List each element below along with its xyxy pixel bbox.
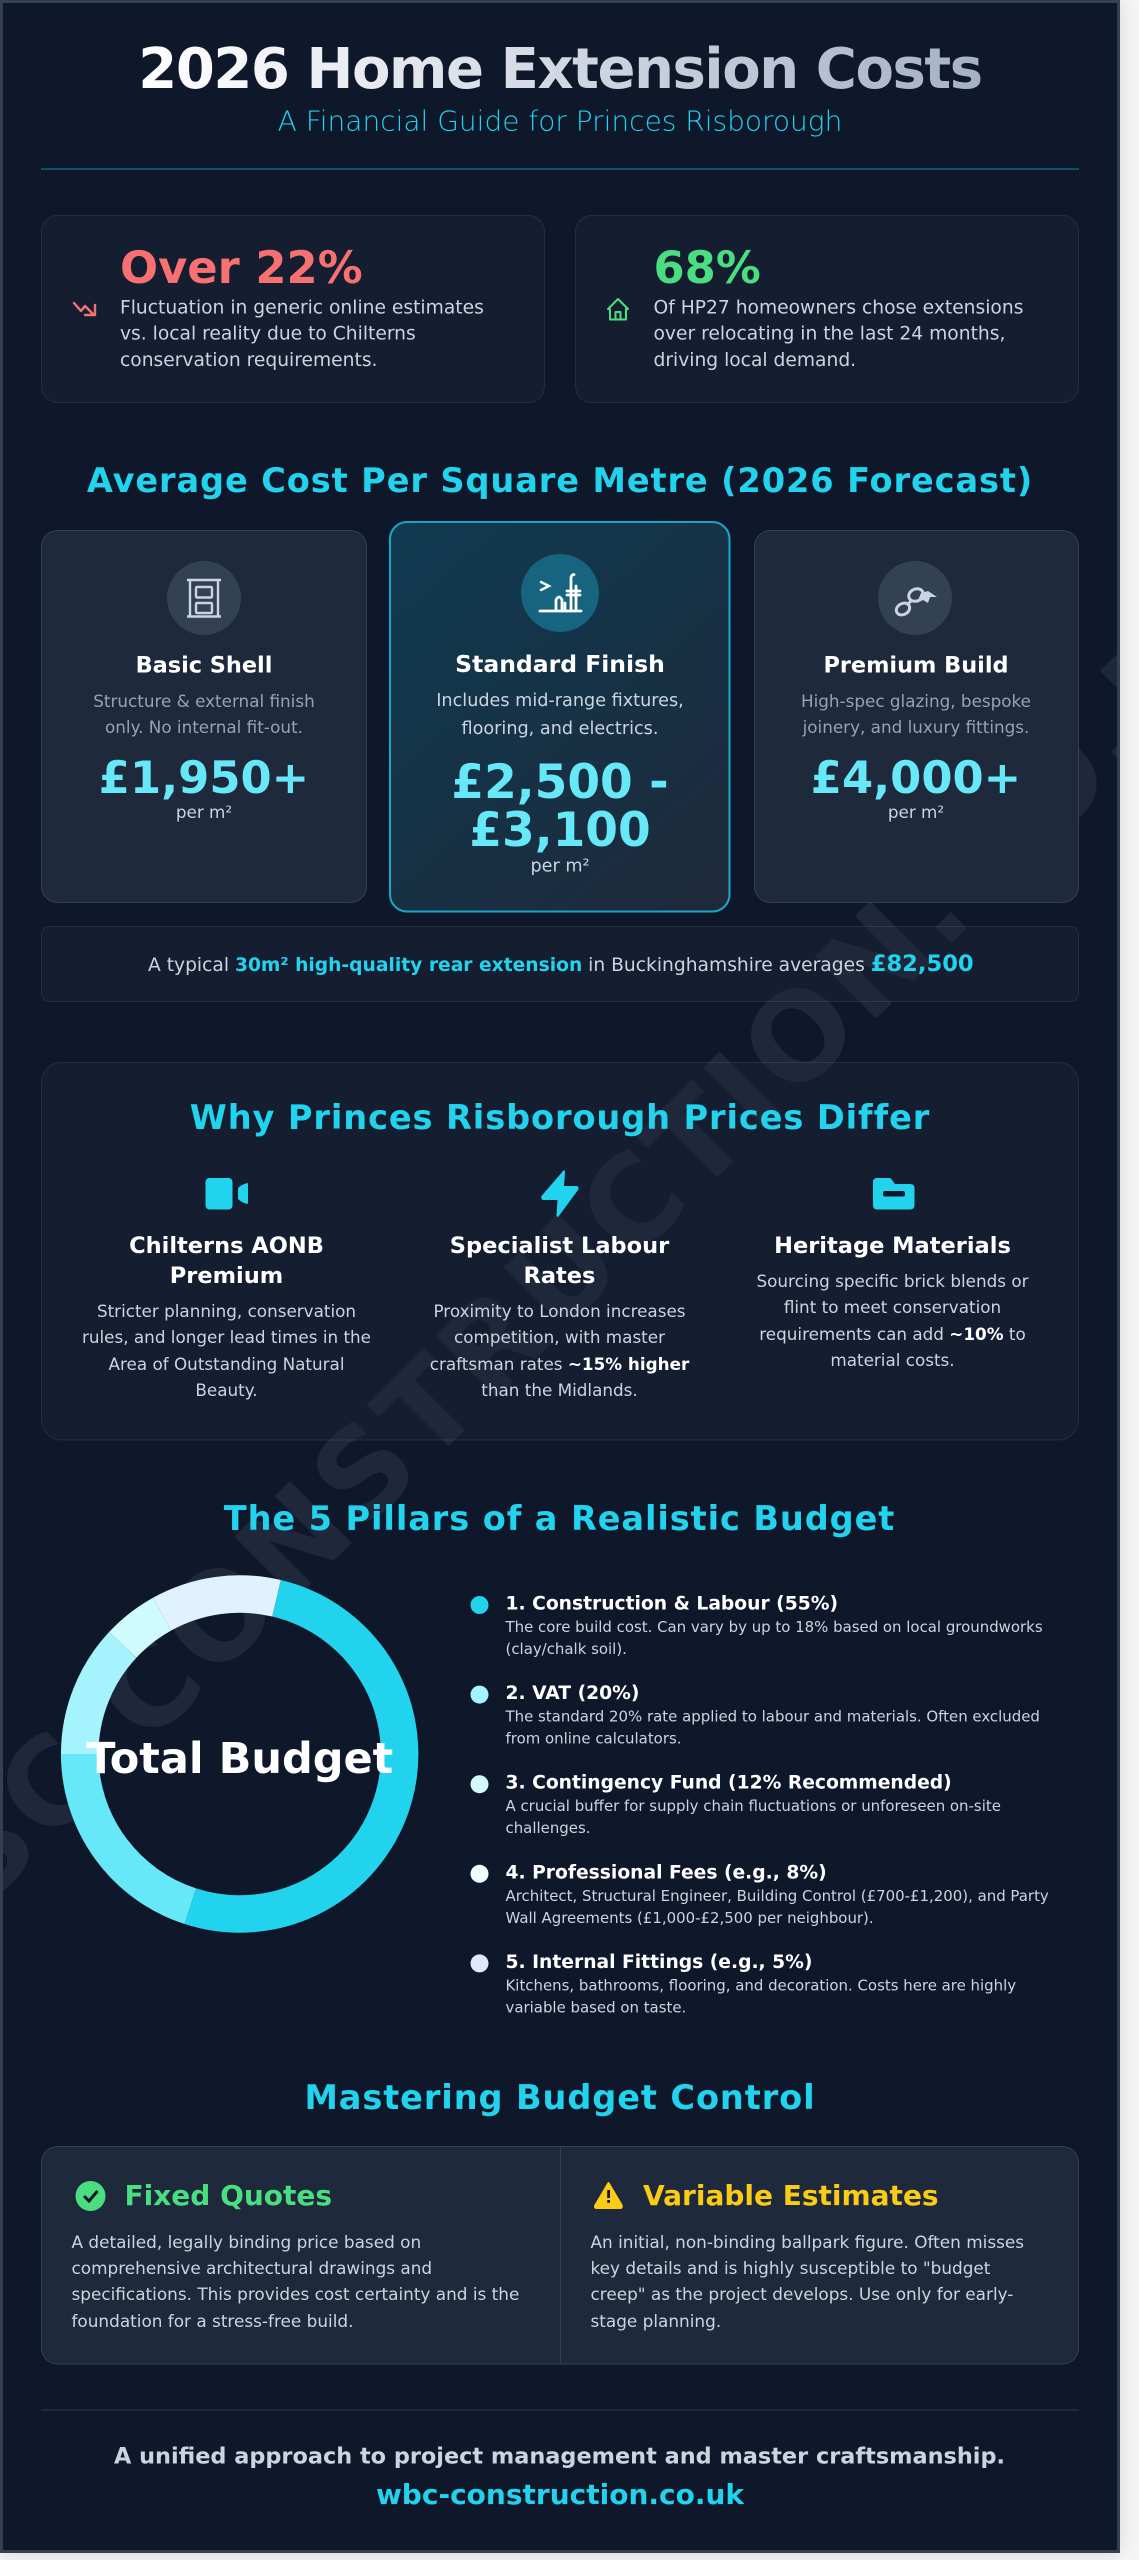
column: heritage — [756, 1178, 1029, 1370]
panel: basic shell — [42, 530, 366, 902]
legend item 4: Wall Agreements (£1,000-£2,500 per neighbour). — [506, 1909, 874, 1927]
legend item 5 — [470, 1952, 1016, 2016]
panel: premium build — [754, 530, 1078, 902]
column text: Area of Outstanding Natural — [109, 1354, 344, 1374]
icon: check — [76, 2181, 106, 2211]
column text: rules, and longer lead times in the — [82, 1327, 371, 1347]
column text: key details and is highly susceptible to "budget — [590, 2258, 991, 2278]
segment: contingency — [80, 1645, 123, 1754]
donut centre label: Total Budget — [86, 1734, 393, 1784]
card description: High-spec glazing, bespoke — [801, 691, 1031, 711]
column text: stage planning. — [590, 2311, 721, 2331]
legend item 5: variable based on taste. — [506, 1998, 686, 2016]
column text — [82, 1301, 371, 1400]
icon: bolt — [541, 1170, 579, 1217]
donut chart — [80, 1594, 400, 1914]
panel: stat over 22% — [42, 216, 544, 402]
panel: stat 68% — [576, 216, 1078, 402]
legend item 4 — [470, 1862, 1049, 1927]
column text: requirements can add ~10% to — [759, 1324, 1026, 1344]
legend item 1: 1. Construction & Labour (55%) — [506, 1594, 838, 1614]
stat description: Of HP27 homeowners chose extensions — [654, 298, 1023, 318]
legend item 3: 3. Contingency Fund (12% Recommended) — [506, 1773, 952, 1794]
legend item 5: Kitchens, bathrooms, flooring, and decoration. Costs here are highly — [506, 1976, 1016, 1994]
legend item 1 — [470, 1594, 1043, 1658]
column heading: Fixed Quotes — [124, 2179, 332, 2212]
legend item 3 — [470, 1773, 1001, 1837]
legend item 3: challenges. — [506, 1819, 590, 1837]
segment: construction — [190, 1598, 400, 1914]
legend item 3: A crucial buffer for supply chain fluctuations or unforeseen on-site — [506, 1797, 1001, 1815]
heading: five pillars: The 5 Pillars of a Realistic Budget — [224, 1499, 895, 1538]
legend item 2: 2. VAT (20%) — [506, 1683, 639, 1704]
column title: Chilterns AONB — [129, 1233, 324, 1259]
icon: trending down — [74, 303, 95, 315]
heading: Why Princes Risborough Prices Differ — [190, 1098, 930, 1137]
column text — [430, 1301, 690, 1400]
price: £1,950+ — [99, 751, 309, 804]
column text: material costs. — [830, 1350, 955, 1370]
price: £2,500 - — [451, 755, 669, 810]
stat description — [120, 298, 484, 371]
legend — [470, 1594, 1049, 2016]
icon: video — [206, 1178, 248, 1210]
legend item 5: 5. Internal Fittings (e.g., 5%) — [506, 1952, 812, 1973]
tagline: A unified approach to project management and master craftsmanship. — [114, 2444, 1005, 2470]
panel: why prices differ — [42, 1062, 1078, 1440]
callout: typical extension: A typical 30m² high-quality rear extension in Buckinghamshire averages £82,500 — [148, 951, 974, 977]
stat value: 68% — [654, 241, 761, 294]
segment: fees — [123, 1614, 162, 1645]
column text: comprehensive architectural drawings and — [72, 2258, 432, 2278]
icon: warning — [595, 2183, 622, 2208]
legend item 2: The standard 20% rate applied to labour and materials. Often excluded — [504, 1708, 1040, 1726]
column heading: Variable Estimates — [643, 2179, 939, 2212]
legend item 2: from online calculators. — [506, 1730, 682, 1748]
column text — [756, 1271, 1029, 1370]
legend item 1: (clay/chalk soil). — [506, 1640, 627, 1658]
column: fixed quotes — [72, 2179, 519, 2331]
column title — [450, 1233, 670, 1289]
heading: average cost: Average Cost Per Square Metre (2026 Forecast) — [87, 461, 1033, 500]
heading: budget control: Mastering Budget Control — [304, 2078, 816, 2117]
stat value: Over 22% — [120, 241, 363, 294]
callout: typical extension — [42, 926, 1078, 1002]
column text — [72, 2232, 519, 2331]
card description — [801, 691, 1031, 737]
segment: vat — [80, 1754, 190, 1906]
column: labour — [430, 1170, 690, 1400]
stat description: driving local demand. — [654, 350, 856, 371]
column text: flint to meet conservation — [784, 1297, 1001, 1317]
column text — [590, 2232, 1024, 2331]
card description: flooring, and electrics. — [462, 719, 658, 739]
column text: creep" as the project develops. Use only for early- — [590, 2284, 1013, 2304]
panel: standard finish — [390, 522, 730, 912]
price: £3,100 — [469, 803, 651, 858]
icon: construction site — [521, 554, 599, 632]
stat description: conservation requirements. — [120, 350, 378, 371]
column text: An initial, non-binding ballpark figure. Often misses — [590, 2232, 1024, 2252]
column title — [129, 1233, 324, 1289]
legend item 1: The core build cost. Can vary by up to 18% based on local groundworks — [504, 1618, 1043, 1636]
stat description — [654, 298, 1023, 371]
card description: joinery, and luxury fittings. — [802, 717, 1029, 737]
title: 2026 Home Extension Costs — [138, 37, 982, 102]
icon: home — [608, 299, 628, 320]
legend item 4: 4. Professional Fees (e.g., 8%) — [506, 1862, 827, 1883]
column: variable estimates — [590, 2179, 1024, 2331]
card title: Basic Shell — [136, 652, 272, 678]
panel: fixed vs variable — [42, 2146, 1078, 2364]
card description — [436, 691, 684, 739]
column text: foundation for a stress-free build. — [72, 2311, 353, 2331]
segment: fittings — [162, 1594, 276, 1614]
footer — [114, 2444, 1005, 2511]
column text: Proximity to London increases — [433, 1301, 686, 1321]
column text: Sourcing specific brick blends or — [756, 1271, 1029, 1291]
column title: Rates — [524, 1263, 595, 1289]
column text: specifications. This provides cost certainty and is the — [72, 2284, 519, 2304]
unit: per m² — [176, 802, 232, 822]
column text: than the Midlands. — [481, 1380, 638, 1400]
website: wbc-construction.co.uk — [376, 2478, 745, 2511]
unit: per m² — [888, 802, 944, 822]
column title: Specialist Labour — [450, 1233, 670, 1259]
card description — [93, 691, 315, 737]
column: chilterns — [82, 1178, 371, 1400]
column title: Heritage Materials — [774, 1233, 1011, 1259]
icon: folder — [873, 1178, 914, 1210]
card description: only. No internal fit-out. — [105, 717, 303, 737]
column title: Premium — [170, 1263, 283, 1289]
subtitle: A Financial Guide for Princes Risborough — [278, 104, 842, 138]
column text: A detailed, legally binding price based on — [72, 2232, 421, 2252]
stat description: over relocating in the last 24 months, — [654, 324, 1005, 344]
column text: craftsman rates ~15% higher — [430, 1354, 690, 1374]
column text: competition, with master — [454, 1327, 665, 1347]
icon: premium — [878, 561, 952, 635]
card description: Structure & external finish — [93, 691, 315, 711]
card title: Standard Finish — [455, 650, 665, 678]
price: £4,000+ — [811, 751, 1021, 804]
icon: door — [167, 561, 241, 635]
stat description: vs. local reality due to Chilterns — [120, 324, 416, 344]
legend item 4: Architect, Structural Engineer, Building Control (£700-£1,200), and Party — [506, 1887, 1049, 1905]
card description: Includes mid-range fixtures, — [436, 691, 684, 711]
legend item 2 — [470, 1683, 1040, 1748]
unit: per m² — [530, 856, 590, 876]
price — [451, 755, 669, 858]
header — [138, 37, 982, 138]
stat description: Fluctuation in generic online estimates — [120, 298, 484, 318]
column text: Stricter planning, conservation — [97, 1301, 356, 1321]
column text: Beauty. — [195, 1380, 258, 1400]
card title: Premium Build — [823, 652, 1009, 678]
